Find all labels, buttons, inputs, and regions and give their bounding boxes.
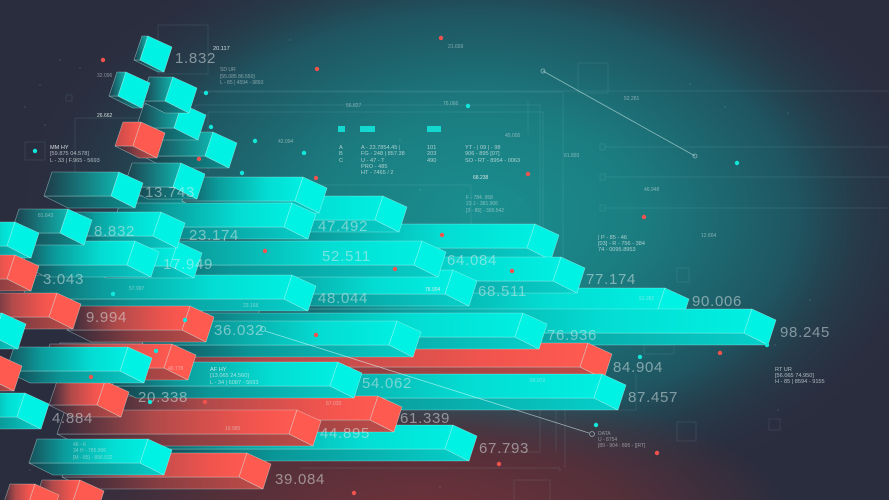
block middle [136, 104, 206, 140]
small data labels: [M - 85] - 896.532 [73, 455, 113, 461]
small data labels: [13.065 24.560] [210, 373, 249, 379]
small data labels: 23.168 [243, 303, 259, 309]
bar 9.994 [67, 306, 214, 342]
small data labels: 46.948 [644, 187, 660, 193]
value labels: 77.174 [586, 271, 636, 288]
bar 36 row [142, 321, 421, 357]
small data labels: 68.238 [473, 175, 489, 181]
block long left [44, 172, 143, 208]
bar 47.492 [122, 196, 407, 232]
small data labels: AF HY [210, 367, 227, 373]
table rows: HT - 7465 / 2 [361, 170, 394, 176]
small data labels: 42.094 [278, 139, 294, 145]
small data labels [38, 44, 825, 461]
bar 98.245 [252, 309, 776, 345]
small data labels: MM HY [50, 145, 69, 151]
small data labels: 21.659 [448, 44, 464, 50]
table rows: C [339, 158, 343, 164]
table rows: 203 [427, 151, 436, 157]
red bar 20.338 [49, 381, 129, 417]
small data labels: 20.117 [213, 46, 230, 52]
cube 1.832 [134, 36, 172, 72]
value labels: 17.949 [163, 256, 213, 273]
value labels: 3.043 [43, 271, 84, 288]
small data labels: [89 - 904 : 895 - ][RT] [598, 443, 646, 449]
value labels: 84.904 [613, 359, 663, 376]
table rows: YT - | 09 | - 98 [465, 145, 500, 151]
table rows: SO - RT - 8954 - 0063 [465, 158, 520, 164]
small data labels: U - 8754 [598, 437, 617, 443]
small data labels: [55.085 86.550] [220, 74, 255, 80]
bar 67.793 [142, 425, 477, 461]
red cube [115, 122, 165, 158]
bar 87.457 [152, 374, 626, 410]
value labels: 13.743 [145, 184, 195, 201]
small data labels: 91.282 [639, 296, 655, 302]
small data labels: [56.065 74.950] [775, 373, 814, 379]
value labels: 87.457 [628, 389, 678, 406]
table rows: U - 47 - T [361, 158, 385, 164]
small data labels: L - 33 | F.965 - 5693 [50, 158, 100, 164]
red bar mid [42, 344, 196, 380]
table rows: B [339, 151, 343, 157]
bar top row [182, 177, 327, 213]
small data labels: 67.033 [326, 401, 342, 407]
small data labels: 78.904 [425, 287, 441, 293]
small data labels: SD UR [220, 67, 236, 73]
small data labels: 57.997 [129, 286, 145, 292]
value labels: 20.338 [138, 389, 188, 406]
value labels: 76.936 [547, 327, 597, 344]
bar 76.936 [142, 313, 547, 349]
value labels: 52.511 [322, 248, 371, 265]
bar 8.832 [67, 212, 185, 248]
small data labels: H - 85 | 8594 - 9155 [775, 379, 825, 385]
small data labels: [59.875 04.578] [50, 151, 89, 157]
small data labels: | P - 85 - 46 [598, 235, 627, 241]
table rows: FG - 248 | 857.38 [361, 151, 405, 157]
small data labels: [3 - 85] - 300.542 [466, 208, 504, 214]
bar 68.511 [192, 270, 477, 306]
bar 61.339 [92, 396, 402, 432]
star specks [24, 40, 810, 488]
left cyan 1 [0, 222, 39, 258]
value labels: 44.895 [320, 425, 370, 442]
value labels: 90.006 [692, 293, 742, 310]
bar 52.511 [92, 241, 446, 277]
block upper [141, 77, 197, 113]
bar 48.044 [22, 275, 316, 311]
left cyan 2 [0, 313, 26, 349]
value labels: 4.884 [52, 410, 93, 427]
cyan bar 3.043 row [22, 241, 159, 277]
cube left [109, 72, 150, 108]
table rows: 906 - 895 [07] [465, 151, 500, 157]
bar 90.006 [272, 288, 689, 324]
cyan bar mid left [6, 347, 152, 383]
table rows: 101 [427, 145, 436, 151]
value labels: 98.245 [780, 324, 830, 341]
value labels: 54.062 [362, 375, 412, 392]
value labels: 68.511 [478, 283, 527, 300]
small data labels: 61.893 [564, 153, 580, 159]
small data labels: 23 J - 381.906 [466, 201, 498, 207]
small data labels: [03] - R - 756 - 384 [598, 241, 645, 247]
left red 1 [0, 255, 39, 291]
bar 17.949 [82, 242, 202, 278]
red data dots [89, 36, 722, 495]
table rows [339, 145, 520, 176]
block 81.643 [11, 209, 92, 245]
value labels: 36.032 [214, 322, 264, 339]
small data labels: 74 - 0095.8953 [598, 247, 636, 253]
data table [338, 126, 520, 176]
value labels: 48.044 [318, 290, 368, 307]
value labels: 8.832 [94, 223, 135, 240]
small data labels: 26.662 [97, 113, 113, 119]
bar 39.084 [62, 453, 271, 489]
small data labels: 12.804 [701, 233, 717, 239]
small data labels: L - 85 | 4594 - 9893 [220, 80, 264, 86]
small data labels: F - 784. 958 [466, 195, 493, 201]
small data labels: DATA [598, 431, 611, 437]
teal data dots [33, 91, 769, 427]
small data labels: 56.827 [346, 103, 362, 109]
table rows: 490 [427, 158, 436, 164]
left red 3 [0, 355, 22, 391]
bar 77.174 [242, 257, 585, 293]
value labels: 67.793 [479, 440, 529, 457]
bottom red block 2 [2, 484, 59, 500]
block upper right [142, 132, 237, 168]
value labels: 39.084 [275, 471, 325, 488]
connector line: top right [541, 69, 697, 158]
small data labels: 76.066 [443, 101, 459, 107]
bar 46-K [29, 439, 172, 475]
value labels: 23.174 [189, 227, 239, 244]
table rows: A [339, 145, 343, 151]
small data labels: 46.778 [168, 366, 184, 372]
block 13.743 [124, 163, 205, 199]
connector line: data callout [261, 327, 594, 436]
bar 54.062 [112, 362, 362, 398]
left cyan 3 [0, 393, 49, 429]
small data labels: 46 - K [73, 442, 87, 448]
bar 44.895 [57, 410, 321, 446]
value labels: 1.832 [175, 50, 216, 67]
small data labels: 45.005 [505, 133, 521, 139]
table rows: A - 23.7854.45 | [361, 145, 400, 151]
value labels: 61.339 [400, 410, 450, 427]
small data labels: 34 H - 785.906 [73, 448, 106, 454]
bottom red block 1 [34, 480, 104, 500]
small data labels: 32.096 [97, 73, 113, 79]
value labels: 9.994 [86, 309, 127, 326]
left red 2 [0, 293, 81, 329]
value labels: 64.084 [447, 252, 497, 269]
small data labels: 65.972 [530, 378, 546, 384]
value labels [43, 50, 830, 488]
value labels: 47.492 [318, 218, 368, 235]
bar 64.084 [222, 224, 559, 260]
small data labels: 52.281 [624, 96, 640, 102]
small data labels: RT UR [775, 367, 792, 373]
table rows: PRO - 485 [361, 164, 387, 170]
small data labels: 19.985 [225, 426, 241, 432]
bar 23.174 [112, 203, 316, 239]
small data labels: L - 34 | 6087 - 5693 [210, 380, 259, 386]
small data labels: 81.643 [38, 213, 54, 219]
bar 84.904 [52, 343, 612, 379]
table header chips [338, 126, 441, 132]
